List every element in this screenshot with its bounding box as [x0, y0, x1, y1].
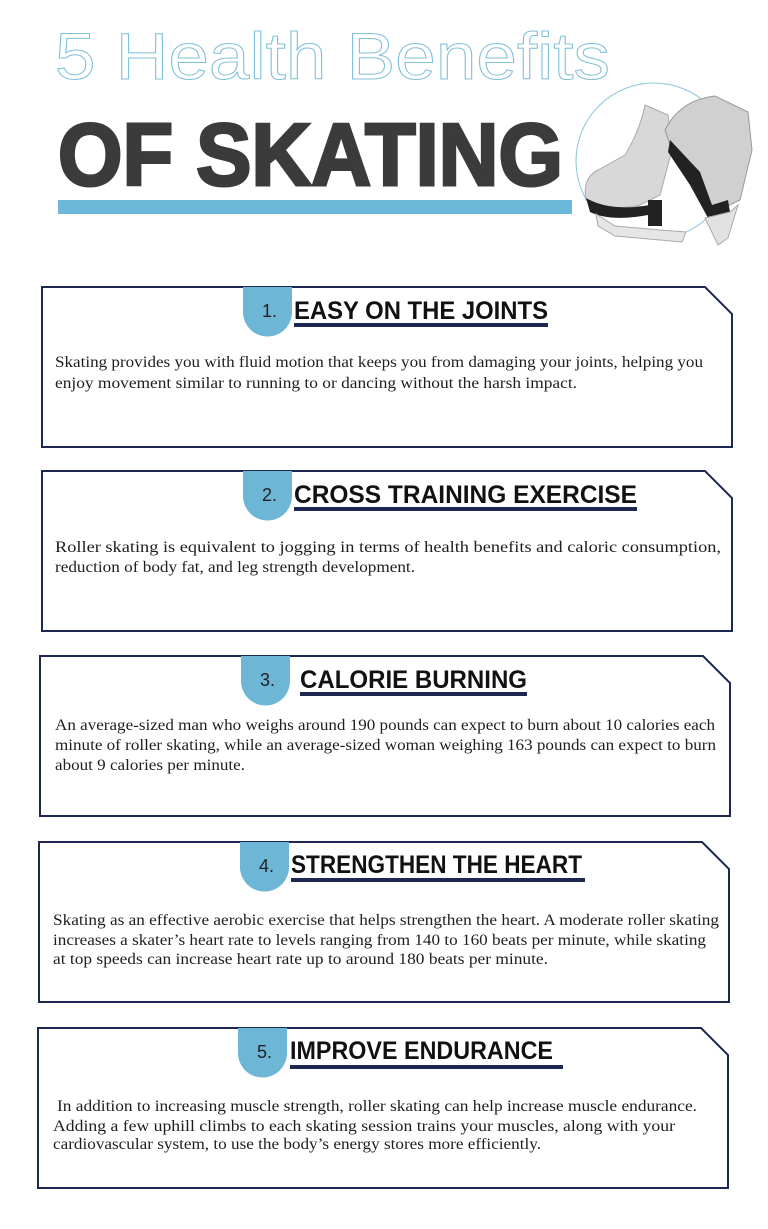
heading 2: CROSS TRAINING EXERCISE — [294, 481, 637, 509]
text 1: enjoy movement similar to running to or dancing without the harsh impact. — [55, 375, 577, 392]
heading 5: IMPROVE ENDURANCE — [290, 1037, 553, 1065]
title underline bar — [58, 200, 572, 214]
text 3 — [55, 717, 716, 774]
right skate boot — [665, 96, 752, 212]
panel 5 — [38, 1028, 728, 1188]
text 5: Adding a few uphill climbs to each skating session trains your muscles, along with your — [53, 1118, 676, 1135]
text 3: minute of roller skating, while an average-sized woman weighing 163 pounds can expect to burn — [55, 737, 716, 754]
title: 5 Health Benefits: 5 Health Benefits — [55, 19, 610, 93]
left skate boot — [585, 105, 672, 208]
badge 5 — [238, 1028, 287, 1078]
text 5: In addition to increasing muscle strength, roller skating can help increase muscle endurance. — [57, 1098, 697, 1115]
badge 4: 4. — [259, 856, 274, 876]
text 3: An average-sized man who weighs around 190 pounds can expect to burn about 10 calories each — [55, 717, 715, 734]
badge 3 — [241, 656, 290, 706]
panel 3 — [40, 656, 730, 816]
text 4: Skating as an effective aerobic exercise that helps strengthen the heart. A moderate roller skating — [53, 912, 719, 929]
text 1: Skating provides you with fluid motion that keeps you from damaging your joints, helping you — [55, 354, 703, 371]
badge 5: 5. — [257, 1042, 272, 1062]
heading 3: CALORIE BURNING — [300, 666, 527, 694]
text 2: Roller skating is equivalent to jogging in terms of health benefits and caloric consumption, — [55, 539, 721, 556]
text 5: cardiovascular system, to use the body’s energy stores more efficiently. — [53, 1136, 541, 1153]
text 2: reduction of body fat, and leg strength development. — [55, 559, 415, 576]
icon: ice skates in circle — [576, 83, 752, 245]
panel 4 — [39, 842, 729, 1002]
text 1 — [55, 354, 703, 392]
heading 4: STRENGTHEN THE HEART — [291, 851, 582, 879]
title: OF SKATING: OF SKATING — [58, 105, 563, 204]
badge 1 — [243, 287, 292, 336]
text 5 — [53, 1098, 697, 1153]
text 4: increases a skater’s heart rate to levels ranging from 140 to 160 beats per minute, while skating — [53, 932, 706, 949]
text 2 — [55, 539, 721, 576]
heading 1: EASY ON THE JOINTS — [294, 297, 548, 325]
badge 2 — [243, 471, 292, 520]
badge 4 — [240, 842, 289, 891]
text 4 — [53, 912, 719, 968]
badge 3: 3. — [260, 670, 275, 690]
panel 2 — [42, 471, 732, 631]
text 4: at top speeds can increase heart rate up to around 180 beats per minute. — [53, 951, 548, 968]
text 3: about 9 calories per minute. — [55, 757, 245, 774]
badge 1: 1. — [262, 301, 277, 321]
panel 1 — [42, 287, 732, 447]
badge 2: 2. — [262, 485, 277, 505]
